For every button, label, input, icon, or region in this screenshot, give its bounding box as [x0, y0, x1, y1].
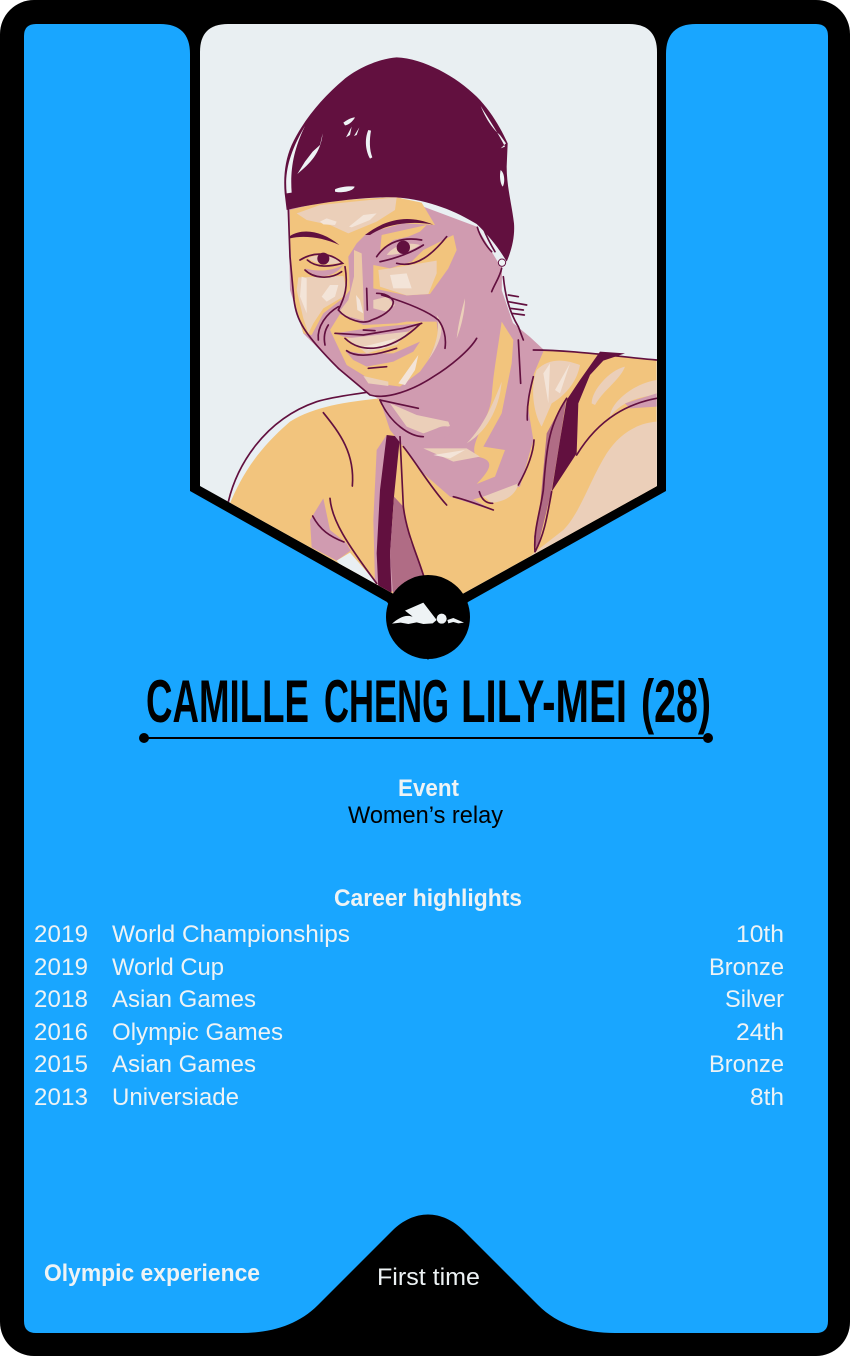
- title: CHENG: [324, 668, 449, 735]
- title: [146, 668, 711, 735]
- table: career highlights: 2019: [34, 954, 88, 981]
- right cheek yellow: [373, 235, 457, 295]
- text block: event: Women’s relay: [348, 802, 503, 829]
- badge circle: [386, 575, 470, 659]
- table: career highlights: 2015: [34, 1051, 88, 1078]
- body ink lines: [228, 340, 657, 583]
- right strap: [534, 397, 567, 552]
- body lower section: [223, 257, 657, 613]
- table: career highlights: 8th: [750, 1084, 784, 1111]
- nose tip: [373, 297, 395, 312]
- skin: chest and shoulders: [223, 350, 657, 613]
- earring: [498, 259, 506, 266]
- table: career highlights: Silver: [725, 986, 784, 1013]
- eyebrows: [290, 232, 339, 245]
- right brow yellow: [380, 225, 427, 252]
- table: career highlights: 10th: [736, 921, 784, 948]
- table: career highlights: Olympic Games: [112, 1019, 283, 1046]
- table: career highlights: 2019: [34, 921, 88, 948]
- nose stripe: [339, 250, 364, 321]
- chin highlights: [363, 376, 388, 386]
- table: career highlights: 2018: [34, 986, 88, 1013]
- skin highlight: right arm: [530, 422, 657, 557]
- forehead and left cheek yellow: [290, 197, 435, 335]
- table: career highlights: Asian Games: [112, 986, 256, 1013]
- table: career highlights: World Cup: [112, 954, 224, 981]
- table: career highlights: Asian Games: [112, 1051, 256, 1078]
- cap highlights: [286, 106, 506, 193]
- face ink lines: [288, 210, 527, 396]
- text block: event: Event: [398, 775, 459, 802]
- left arm crease: [310, 498, 351, 561]
- table: career highlights: Bronze: [709, 954, 784, 981]
- left cheek light: [297, 276, 347, 333]
- swim cap: [284, 57, 514, 262]
- left strap: [373, 436, 393, 592]
- neck pink: [307, 257, 544, 511]
- forehead light: [297, 197, 397, 233]
- heading: career highlights: Career highlights: [334, 885, 522, 912]
- title: LILY-MEI: [461, 668, 627, 735]
- right shoulder highlights: [533, 361, 580, 427]
- table: career highlights: Universiade: [112, 1084, 239, 1111]
- right cheek light: [378, 261, 437, 295]
- eye shadows: [305, 265, 343, 276]
- text block: event: [348, 775, 503, 829]
- head cap: [284, 57, 514, 266]
- face: [288, 197, 527, 397]
- icon: swimmer badge: [386, 575, 470, 659]
- collar highlights: [390, 403, 450, 433]
- panel: portrait illustration: [200, 24, 657, 624]
- title underline: [139, 733, 713, 743]
- value: first time: First time: [377, 1264, 480, 1291]
- lower lip shadow: [345, 342, 420, 367]
- table: career highlights: 2016: [34, 1019, 88, 1046]
- mouth: [337, 324, 418, 338]
- portrait background: [200, 24, 657, 624]
- swimmer: [392, 603, 464, 624]
- chin yellow: [330, 314, 438, 387]
- table: career highlights: 2013: [34, 1084, 88, 1111]
- eyes: [308, 255, 340, 264]
- face base: [288, 197, 502, 397]
- title: (28): [641, 668, 711, 735]
- label: olympic experience: Olympic experience: [44, 1260, 260, 1287]
- table: career highlights: World Championships: [112, 921, 350, 948]
- title: CAMILLE: [146, 668, 309, 735]
- table: career highlights: [34, 921, 784, 1111]
- table: career highlights: Bronze: [709, 1051, 784, 1078]
- gap under arm: [336, 552, 378, 586]
- neck yellow: [474, 322, 513, 484]
- table: career highlights: 24th: [736, 1019, 784, 1046]
